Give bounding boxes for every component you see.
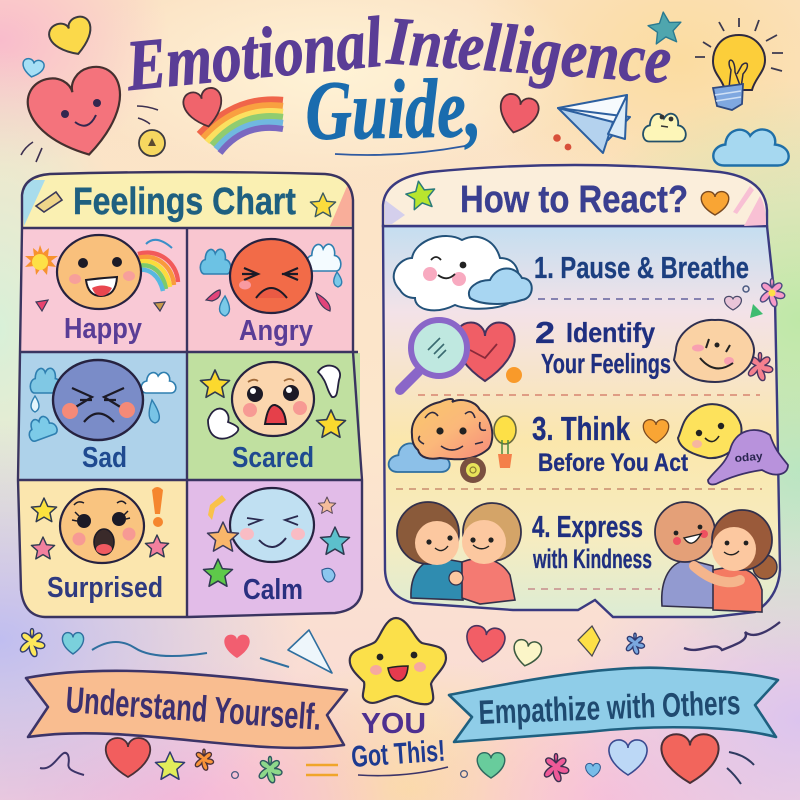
icon: clouds xyxy=(30,368,176,393)
bottom doodles lower left xyxy=(40,738,338,783)
title xyxy=(122,2,674,158)
icon: heart right of guide xyxy=(495,92,541,137)
bottom doodles upper right xyxy=(464,622,780,668)
icon: stars xyxy=(203,495,350,586)
icon: sun xyxy=(25,245,58,275)
icon: swirl coin xyxy=(460,457,486,483)
step 3 xyxy=(389,399,788,484)
panel: how to react xyxy=(383,165,788,617)
icon: clouds xyxy=(200,244,341,274)
icon: wisps xyxy=(208,366,340,439)
icon: stars and exclamation xyxy=(31,487,169,559)
face: happy xyxy=(57,235,141,309)
icon: rainbow xyxy=(138,253,178,291)
text: you got this xyxy=(350,708,448,776)
text: express with kindness xyxy=(532,509,652,574)
icon: blue cloud xyxy=(713,129,789,166)
text: think before you act: 3. Think xyxy=(532,410,631,447)
title: Intelligence xyxy=(384,2,674,98)
feelings chart header: Feelings Chart xyxy=(73,181,296,223)
face: calm xyxy=(230,488,314,562)
cell: angry xyxy=(187,229,354,352)
text: identify your feelings: 2 xyxy=(535,315,555,350)
icon: yellow face xyxy=(678,404,742,458)
icon: heart behind magnifier xyxy=(455,322,515,381)
banner: empathize with others xyxy=(449,668,778,742)
icon: small face blob xyxy=(643,114,686,142)
feelings chart header xyxy=(22,172,353,228)
bottom doodles lower right xyxy=(461,734,754,784)
icon: orange dot xyxy=(506,367,522,383)
icon: light bulb xyxy=(695,18,783,110)
icon: brain xyxy=(412,399,492,459)
icon: yellow heart xyxy=(46,14,98,61)
text: you got this: Got This! xyxy=(350,735,446,774)
icon: bulb xyxy=(494,416,516,468)
face: angry xyxy=(230,239,312,313)
icon: drops xyxy=(206,272,342,316)
bottom doodles left xyxy=(20,629,250,658)
label: surprised: Surprised xyxy=(47,572,163,604)
label: calm: Calm xyxy=(243,574,303,606)
icon: red heart xyxy=(181,86,227,131)
label: sad: Sad xyxy=(82,442,127,474)
icon: blue cloud under brain xyxy=(389,443,450,472)
icon: purple speech blob xyxy=(708,430,788,484)
star mascot xyxy=(350,618,446,704)
title: Guide, xyxy=(305,62,482,158)
label: happy: Happy xyxy=(64,313,142,345)
react panel header xyxy=(383,165,767,226)
step 4 xyxy=(397,502,777,612)
icon: smiling cloud xyxy=(394,236,532,310)
icon: accents xyxy=(36,240,172,311)
icon: magnifier xyxy=(400,320,467,390)
cell: happy xyxy=(21,229,187,352)
icon: rainbow xyxy=(199,99,283,153)
icon: coin xyxy=(139,130,165,156)
text: express with kindness: 4. Express xyxy=(532,509,643,544)
step 1 xyxy=(394,236,785,318)
cell: surprised xyxy=(19,480,187,617)
react panel body xyxy=(383,226,780,617)
icon: stars xyxy=(200,370,346,437)
text: think before you act xyxy=(532,410,689,477)
face: surprised xyxy=(60,489,144,563)
react panel header: How to React? xyxy=(460,179,688,221)
face: sad xyxy=(53,360,143,440)
icon: red dots xyxy=(553,134,571,150)
icon: peach blob face xyxy=(674,320,773,382)
icon: orange heart xyxy=(643,420,669,443)
icon: teal star xyxy=(647,10,683,45)
text: identify your feelings xyxy=(535,315,671,379)
banner: understand yourself: Understand Yourself. xyxy=(64,679,323,738)
icon: purple speech blob: oday xyxy=(734,451,764,465)
text: think before you act: Before You Act xyxy=(538,449,689,477)
label: angry: Angry xyxy=(239,315,313,347)
panel frame and grid lines xyxy=(18,172,362,617)
text: identify your feelings: Identify xyxy=(566,317,655,348)
icon: large smiling heart xyxy=(21,61,158,167)
icon: paper plane small xyxy=(92,630,332,673)
face: scared xyxy=(232,362,314,436)
step 2 xyxy=(400,315,773,390)
dividers xyxy=(396,299,762,589)
icon: flower cluster xyxy=(725,279,785,318)
label: scared: Scared xyxy=(232,442,314,474)
text: express with kindness: with Kindness xyxy=(532,544,652,574)
text: you got this: YOU xyxy=(361,708,426,740)
icon: paper plane xyxy=(558,95,630,153)
text: identify your feelings: Your Feelings xyxy=(541,348,671,379)
panel: feelings chart xyxy=(18,172,362,617)
cell: calm xyxy=(188,480,362,617)
icon: drops xyxy=(25,396,159,442)
icon: hugging couple right xyxy=(655,502,777,612)
icon: hugging children left xyxy=(397,502,521,604)
icon: small blue heart xyxy=(21,58,45,79)
cell: scared xyxy=(187,353,360,479)
cell: sad xyxy=(20,353,187,479)
banner: understand yourself xyxy=(26,671,347,748)
